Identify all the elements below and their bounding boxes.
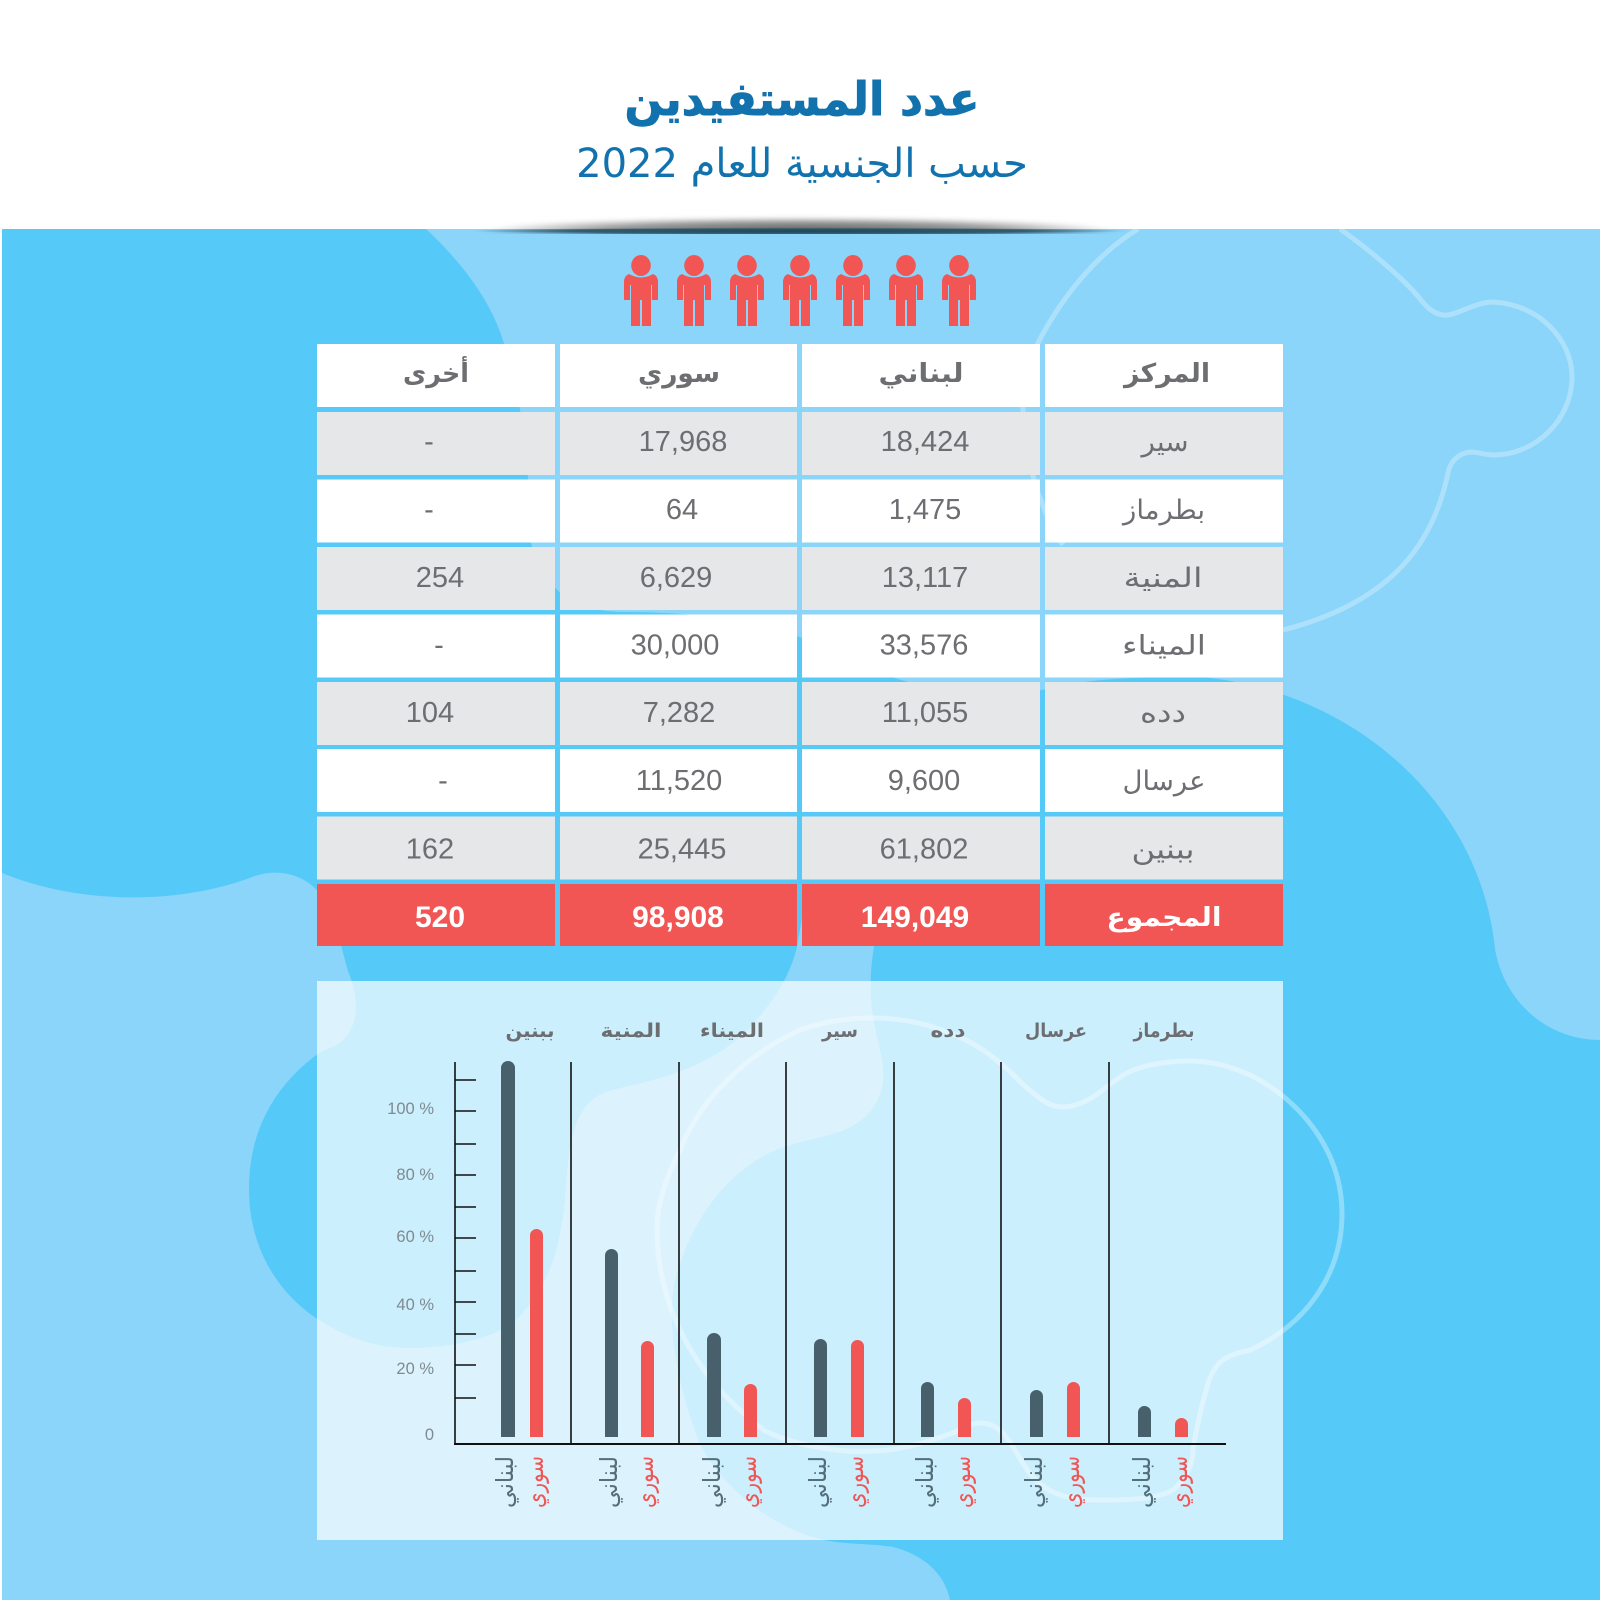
rotated labels: Syrian: سوري	[521, 1456, 549, 1508]
panel: bar chart	[317, 981, 1283, 1540]
subtitle: حسب الجنسية للعام 2022	[576, 141, 1028, 187]
table header row: لبناني	[878, 359, 964, 389]
row: بطرماز: 64	[666, 494, 698, 526]
rotated labels: Lebanese: لبناني	[491, 1456, 519, 1508]
row: دده	[317, 682, 1283, 745]
chart category headings: سير	[821, 1020, 858, 1042]
bars: Lebanese	[501, 1061, 1151, 1437]
row: المنية: المنية	[1124, 563, 1202, 594]
row: سير: -	[424, 426, 434, 458]
rotated labels: Lebanese: لبناني	[1128, 1456, 1156, 1508]
y axis labels: 80 %	[396, 1166, 434, 1184]
rotated labels: Lebanese: لبناني	[804, 1456, 832, 1508]
row: المنية: 6,629	[640, 562, 712, 594]
row: الميناء: -	[434, 630, 444, 662]
row: دده: دده	[1140, 698, 1186, 729]
row: total	[317, 884, 1283, 946]
rotated labels: Lebanese: لبناني	[1020, 1456, 1048, 1508]
row: عرسال	[317, 749, 1283, 812]
chart category headings	[506, 1020, 1194, 1042]
icon row: seven people	[624, 255, 976, 326]
rotated labels: Syrian	[521, 1456, 1193, 1508]
row: بطرماز: 1,475	[889, 494, 961, 526]
rotated labels: Lebanese: لبناني	[698, 1456, 726, 1508]
row: المنية: 13,117	[882, 562, 968, 594]
rotated labels: Lebanese	[491, 1456, 1156, 1508]
y axis labels	[387, 1100, 434, 1444]
chart category headings: المنية	[600, 1020, 662, 1042]
row: سير: 18,424	[881, 426, 969, 458]
table header row	[317, 344, 1283, 407]
y axis labels: 60 %	[396, 1228, 434, 1246]
y axis labels: 0	[425, 1426, 434, 1444]
rotated labels: Syrian: سوري	[948, 1456, 976, 1508]
row: ببنين: ببنين	[1132, 834, 1194, 866]
axes and ticks	[454, 1062, 1226, 1444]
rotated labels: Lebanese: لبناني	[595, 1456, 623, 1508]
row: المنية	[317, 547, 1283, 610]
rotated labels: Syrian: سوري	[631, 1456, 659, 1508]
row: عرسال: 9,600	[888, 765, 960, 797]
row: دده: 11,055	[882, 697, 968, 729]
row: total: 149,049	[861, 901, 969, 934]
chart category headings: بطرماز	[1133, 1020, 1194, 1042]
row: ببنين: 162	[406, 834, 454, 866]
row: دده: 7,282	[643, 697, 715, 729]
row: عرسال: 11,520	[636, 765, 722, 797]
row: سير: سير	[1139, 427, 1188, 458]
chart category headings: دده	[930, 1020, 966, 1042]
y axis labels: 40 %	[396, 1296, 434, 1314]
title: عدد المستفيدين	[624, 72, 980, 126]
row: الميناء	[317, 614, 1283, 678]
row: عرسال: -	[438, 765, 448, 797]
rotated labels: Syrian: سوري	[734, 1456, 762, 1508]
row: total: 98,908	[632, 901, 724, 934]
row: بطرماز	[317, 480, 1283, 542]
row: بطرماز: بطرماز	[1121, 495, 1205, 526]
row: بطرماز: -	[424, 494, 434, 526]
row: total: 520	[415, 901, 465, 934]
table header row: سوري	[638, 359, 720, 389]
row: ببنين	[317, 816, 1283, 880]
table	[317, 344, 1283, 946]
chart category headings: عرسال	[1025, 1020, 1087, 1042]
header shadow	[479, 216, 1122, 234]
row: عرسال: عرسال	[1122, 766, 1206, 797]
rotated labels: Syrian: سوري	[1057, 1456, 1085, 1508]
bars: Syrian	[530, 1229, 1188, 1437]
table header row: المركز	[1122, 359, 1210, 389]
row: سير	[317, 412, 1283, 475]
chart category headings: ببنين	[506, 1020, 554, 1042]
chart category headings: الميناء	[700, 1020, 764, 1042]
y axis labels: 20 %	[396, 1360, 434, 1378]
row: ببنين: 61,802	[880, 834, 968, 866]
rotated labels: Syrian: سوري	[1165, 1456, 1193, 1508]
row: total: المجموع	[1106, 903, 1222, 933]
row: ببنين: 25,445	[638, 834, 726, 866]
row: سير: 17,968	[639, 426, 727, 458]
row: دده: 104	[406, 697, 454, 729]
row: الميناء: 33,576	[880, 630, 968, 662]
table header row: أخرى	[403, 356, 469, 389]
rotated labels: Syrian: سوري	[841, 1456, 869, 1508]
y axis labels: 100 %	[387, 1100, 434, 1118]
row: المنية: 254	[416, 562, 464, 594]
row: الميناء: 30,000	[631, 630, 719, 662]
row: الميناء: الميناء	[1122, 630, 1206, 662]
rotated labels: Lebanese: لبناني	[911, 1456, 939, 1508]
